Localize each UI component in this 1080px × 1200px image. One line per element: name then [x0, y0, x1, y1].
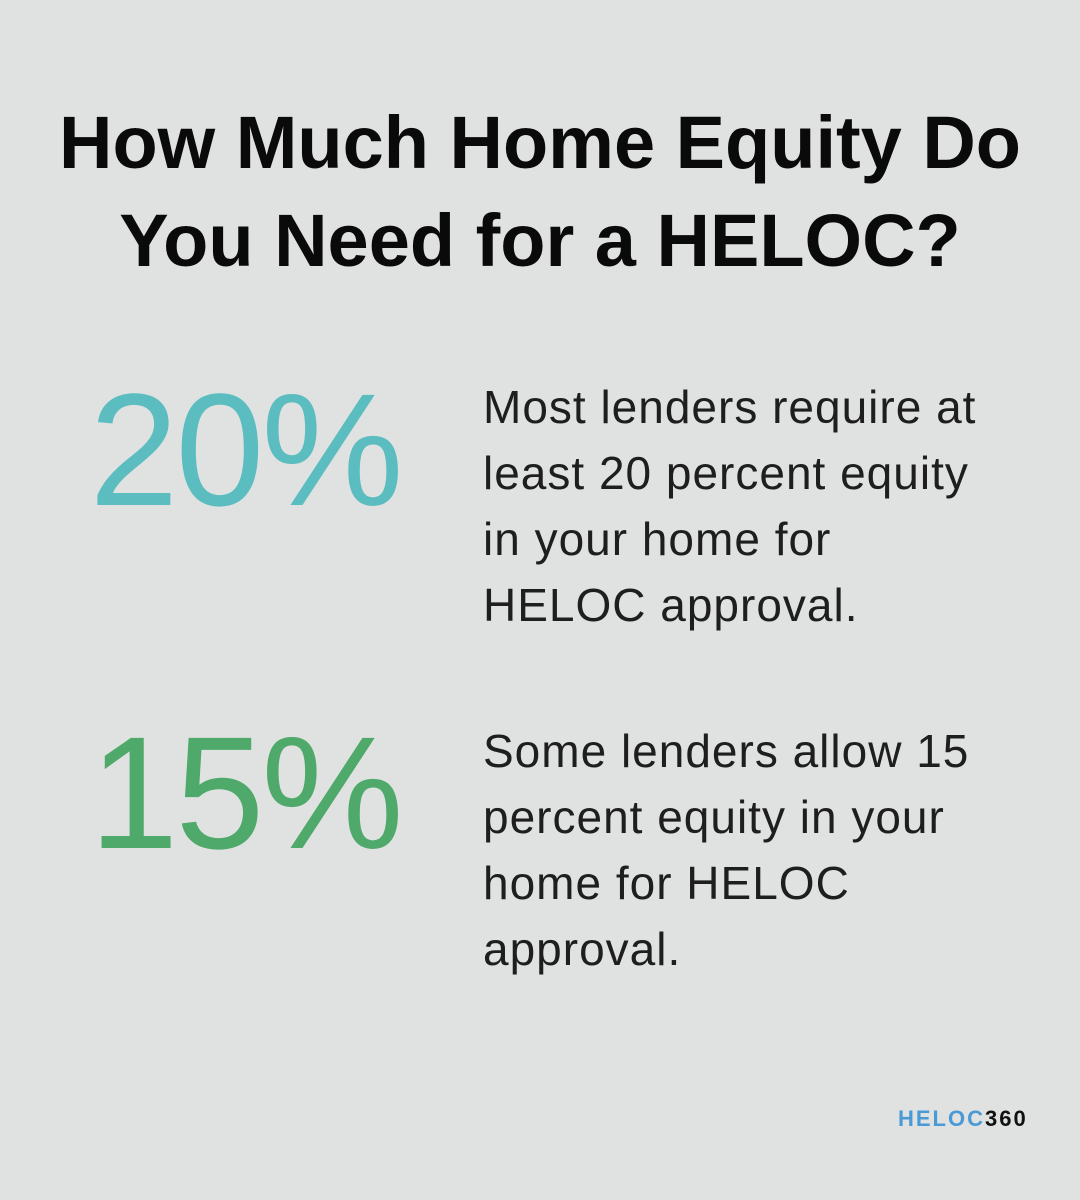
title: How Much Home Equity Do	[59, 101, 1021, 184]
text: 15% description: percent equity in your	[483, 791, 945, 843]
text: 15% description: home for HELOC	[483, 857, 850, 909]
text: 20% description: in your home for	[483, 513, 831, 565]
title: You Need for a HELOC?	[119, 199, 961, 282]
text: 15% description	[483, 725, 969, 975]
text: 15% description: approval.	[483, 923, 681, 975]
text: 20% description: HELOC approval.	[483, 579, 858, 631]
stat: 20%: 20%	[89, 360, 401, 539]
logo: HELOC360	[898, 1106, 1028, 1131]
text: 15% description: Some lenders allow 15	[483, 725, 969, 777]
text: 20% description: Most lenders require at	[483, 381, 976, 433]
text: 20% description	[483, 381, 976, 631]
text: 20% description: least 20 percent equity	[483, 447, 969, 499]
stat: 15%: 15%	[89, 703, 401, 882]
title	[59, 101, 1021, 282]
